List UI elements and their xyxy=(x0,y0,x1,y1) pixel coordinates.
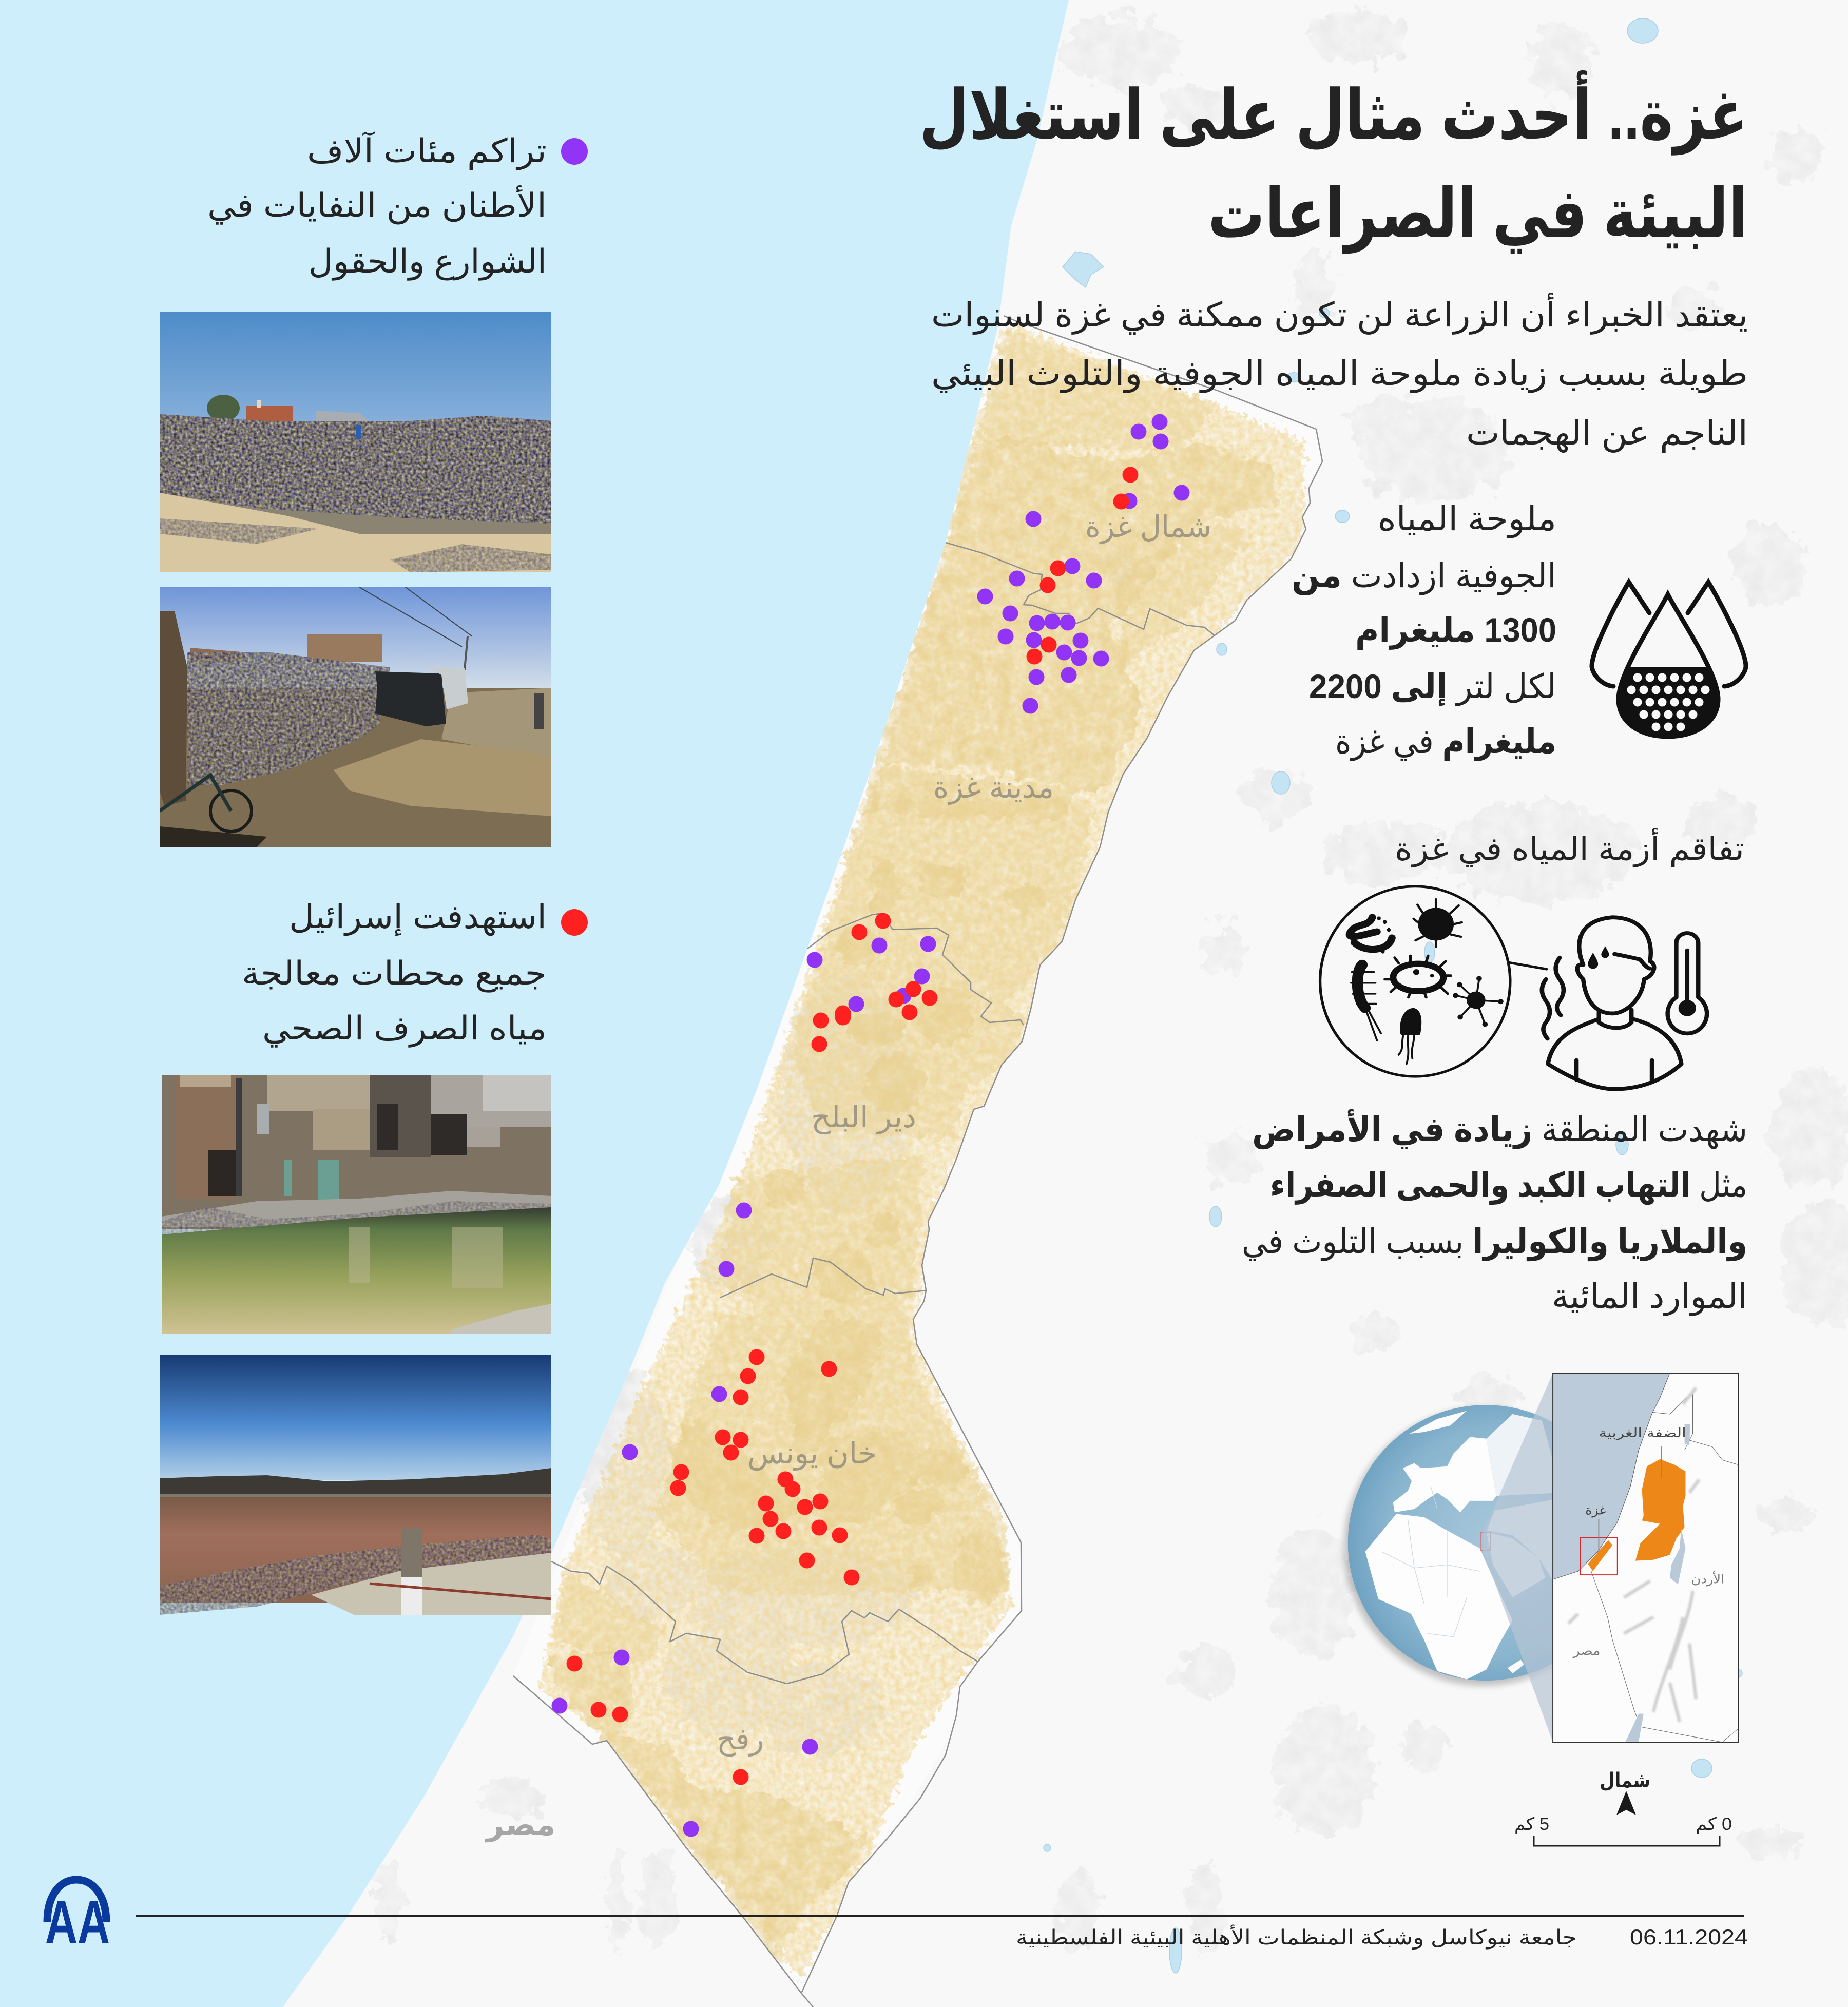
germ: bacillus xyxy=(1351,965,1381,1040)
globe shadow xyxy=(1344,1407,1622,1686)
strip base xyxy=(513,316,1322,1993)
disease paragraph: مثل التهاب الكبد والحمى الصفراء xyxy=(1270,1166,1747,1205)
germ: star virus xyxy=(1453,976,1504,1027)
map place labels: دير البلح xyxy=(811,1101,916,1135)
footer rule xyxy=(136,1915,1744,1917)
scale bar: 0 كم xyxy=(1696,1815,1732,1834)
salinity text: مليغرام في غزة xyxy=(1335,722,1556,762)
medium density areas xyxy=(554,329,1253,1663)
intro paragraph: يعتقد الخبراء أن الزراعة لن تكون ممكنة في غزة لسنوات xyxy=(931,293,1748,335)
water crisis heading: تفاقم أزمة المياه في غزة xyxy=(1395,828,1744,867)
map place labels: رفح xyxy=(717,1723,764,1757)
land settlements texture xyxy=(375,10,1848,1956)
salinity text: ملوحة المياه xyxy=(1378,499,1556,538)
inset sea xyxy=(1553,1373,1670,1579)
legend dot red xyxy=(561,909,588,936)
globe xyxy=(1348,1405,1624,1681)
germ: oval bacterium xyxy=(1385,956,1451,997)
map place labels: مصر xyxy=(485,1808,555,1843)
map: Gaza Strip xyxy=(513,316,1322,1993)
scale bar xyxy=(1514,1815,1732,1846)
inset map: الضفة الغربية xyxy=(1599,1426,1686,1440)
legend: wastewater xyxy=(242,898,588,1048)
logo: AA: AA xyxy=(45,1888,110,1956)
inset terrain xyxy=(1568,1388,1699,1722)
photo: destroyed buildings and green sewage xyxy=(162,1075,551,1334)
photo: garbage mound xyxy=(160,312,551,572)
intro paragraph: طويلة بسبب زيادة ملوحة المياه الجوفية والتلوث البيئي xyxy=(931,354,1748,393)
title xyxy=(919,70,1748,254)
zoom cone xyxy=(1483,1373,1553,1742)
inset map xyxy=(1553,1373,1739,1742)
logo: AA xyxy=(45,1880,110,1956)
built-up grey areas xyxy=(580,549,1145,1755)
inset borders xyxy=(1591,1395,1739,1742)
map place labels: شمال غزة xyxy=(1085,510,1211,545)
icon: sick person and germs xyxy=(1320,886,1707,1089)
legend: solid waste: الأطنان من النفايات في xyxy=(207,185,547,225)
legend: wastewater: جميع محطات معالجة xyxy=(242,955,547,993)
legend: solid waste: تراكم مئات آلاف xyxy=(307,131,547,170)
salinity text: لكل لتر إلى 2200 xyxy=(1309,667,1556,707)
intro paragraph: الناجم عن الهجمات xyxy=(1466,414,1748,453)
north arrow: شمال xyxy=(1600,1769,1650,1792)
inset map: غزة xyxy=(1585,1504,1606,1518)
north arrow xyxy=(1600,1769,1650,1815)
governorate boundaries xyxy=(513,316,1322,2007)
germ: squiggles xyxy=(1350,917,1392,952)
germ: round virus xyxy=(1414,899,1462,947)
icon: water drops with salt xyxy=(1592,582,1746,739)
legend dot purple xyxy=(561,138,588,165)
map place labels: مدينة غزة xyxy=(933,771,1054,805)
locator map: globe and inset xyxy=(1344,1373,1739,1742)
legend: solid waste: الشوارع والحقول xyxy=(309,243,547,281)
legend: wastewater: مياه الصرف الصحي xyxy=(262,1010,547,1048)
salinity text: 1300 مليغرام xyxy=(1355,611,1556,650)
disease paragraph: شهدت المنطقة زيادة في الأمراض xyxy=(1252,1109,1747,1149)
dense urban areas xyxy=(553,435,1279,1976)
water bodies xyxy=(1044,18,1742,1973)
disease paragraph: الموارد المائية xyxy=(1552,1277,1747,1316)
inset map: مصر xyxy=(1573,1644,1601,1658)
West Bank xyxy=(1635,1459,1685,1561)
disease paragraph: والملاريا والكوليرا بسبب التلوث في xyxy=(1242,1222,1747,1262)
scale bar: 5 كم xyxy=(1514,1815,1549,1834)
wastewater plant markers (red) xyxy=(567,467,1139,1785)
Dead Sea and Red Sea xyxy=(1626,1424,1690,1742)
germ: jelly xyxy=(1399,1010,1419,1064)
salinity text: الجوفية ازدادت من xyxy=(1292,556,1556,595)
solid-waste site markers (purple) xyxy=(551,414,1190,1837)
legend: wastewater: استهدفت إسرائيل xyxy=(289,898,547,936)
title: البيئة في الصراعات xyxy=(1208,176,1748,254)
sparse speckle xyxy=(539,323,1304,1981)
photo: garbage and sewage road xyxy=(160,587,551,847)
Gaza highlight xyxy=(1588,1540,1612,1571)
disease paragraph xyxy=(1242,1109,1747,1316)
source: جامعة نيوكاسل وشبكة المنظمات الأهلية البيئية الفلسطينية xyxy=(1016,1924,1577,1950)
date: 06.11.2024 xyxy=(1630,1925,1748,1949)
intro paragraph xyxy=(931,293,1748,453)
inset map: الأردن xyxy=(1691,1572,1724,1587)
photo: polluted lake xyxy=(160,1355,551,1615)
salinity text xyxy=(1292,499,1556,762)
map place labels: خان يونس xyxy=(747,1437,877,1471)
map place labels xyxy=(485,510,1211,1843)
legend: solid waste xyxy=(207,131,588,281)
